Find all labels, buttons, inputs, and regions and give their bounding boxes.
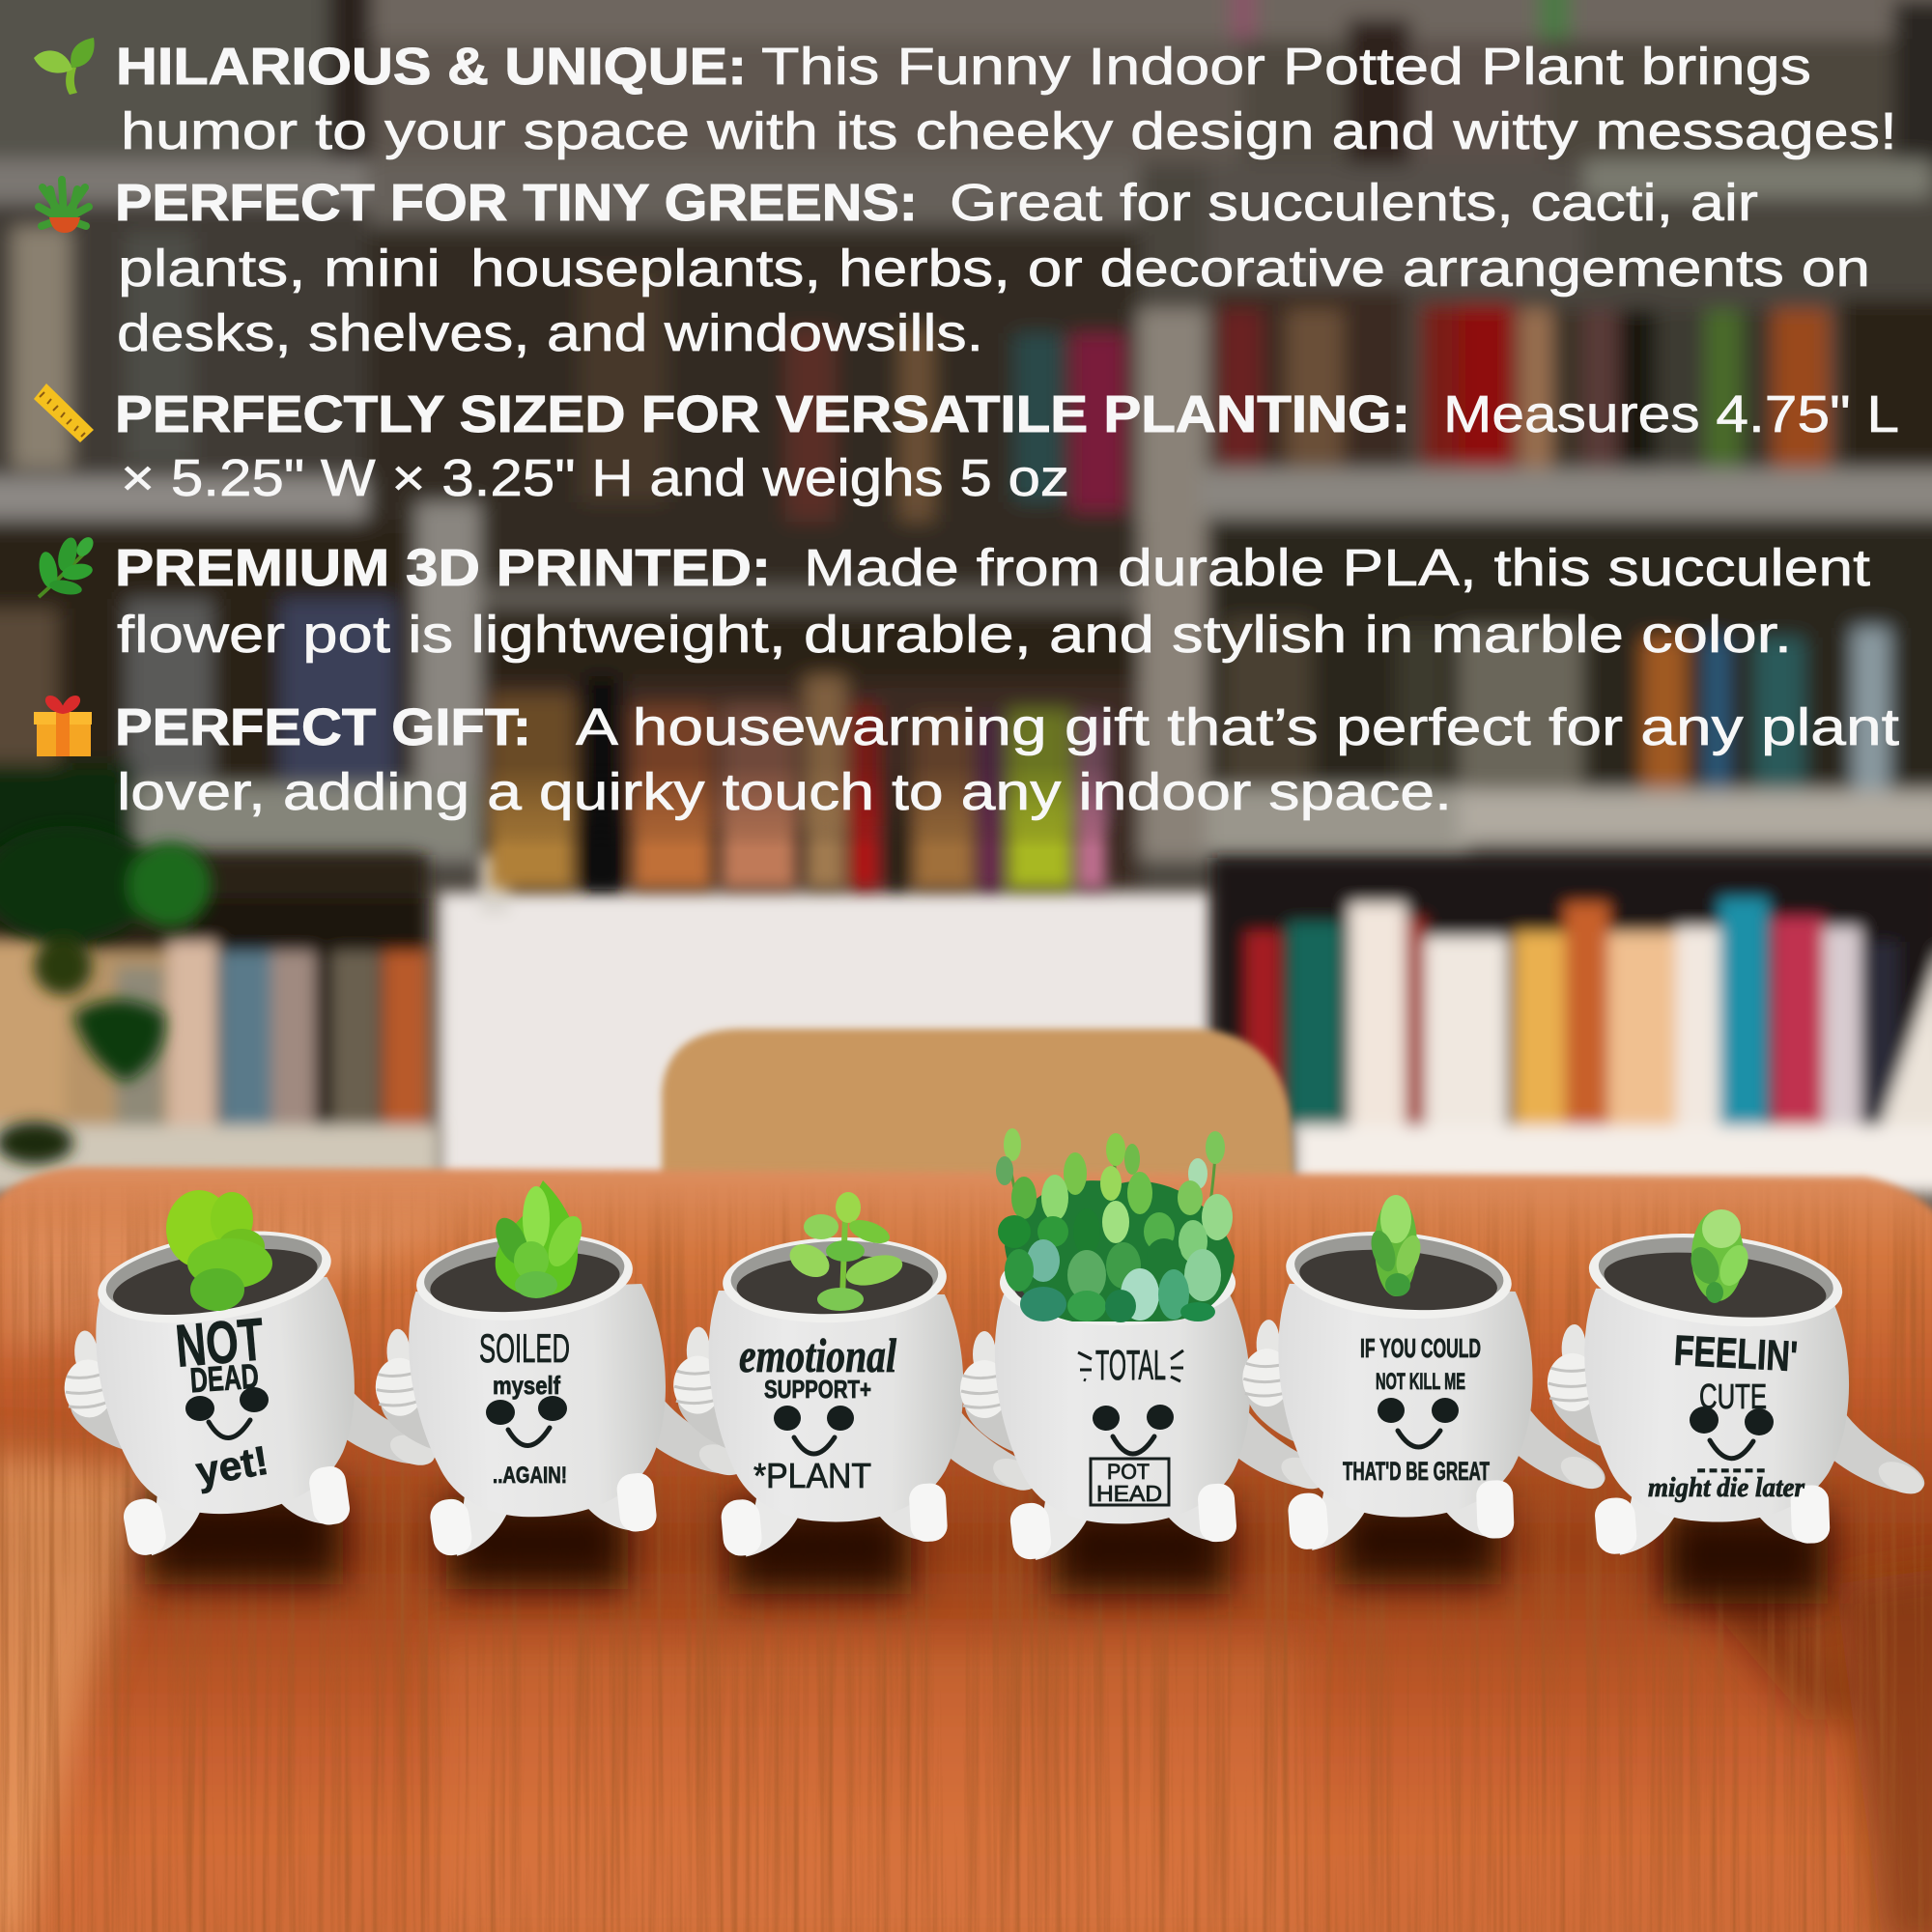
background: blurred bookshelves [0, 0, 1932, 1203]
text: heading and description: PERFECT GIFT: [115, 698, 531, 756]
pot wording: CUTE [1699, 1377, 1767, 1416]
pot shadows on table [145, 1488, 1828, 1604]
feature 2: perfect for tiny greens [39, 174, 1870, 362]
pot body [58, 1270, 445, 1562]
pot body [670, 1290, 1044, 1563]
pot wording [1343, 1333, 1490, 1486]
text: heading and description: This Funny Indoor Potted Plant brings [761, 38, 1811, 96]
pot wording: emotional [739, 1328, 896, 1382]
text: heading and description: Great for succulents, cacti, air [950, 174, 1758, 232]
icon: gift box [34, 697, 92, 756]
text: heading and description [116, 38, 1897, 160]
pot body [1542, 1287, 1932, 1567]
pot body [1236, 1282, 1615, 1561]
feature 4: premium 3D printed [37, 534, 1870, 664]
pot wording [1078, 1342, 1183, 1506]
face [486, 1396, 567, 1446]
face [185, 1387, 269, 1438]
pot wording: *PLANT [753, 1456, 871, 1495]
lower shelving and white frame [440, 855, 1212, 1203]
feature 5: perfect gift [34, 697, 1899, 821]
colored book spines under the overlay [480, 681, 1140, 889]
pot body [960, 1294, 1330, 1561]
pot rim with soil [1282, 1223, 1516, 1327]
pot wording: myself [493, 1371, 560, 1400]
wooden table [0, 1159, 1932, 1932]
pot body [372, 1280, 751, 1559]
pot wording: ...... [1695, 1453, 1767, 1477]
face [1093, 1405, 1174, 1454]
blurred green plant at left [0, 826, 212, 1164]
text: heading and description: PERFECTLY SIZED FOR VERSATILE PLANTING: [115, 385, 1410, 443]
pot rim with soil [92, 1216, 337, 1338]
pot rim with soil [1000, 1240, 1236, 1325]
pot rim with soil [1584, 1222, 1847, 1338]
pot 1: NOT DEAD yet [58, 1190, 445, 1562]
text: heading and description: flower pot is lightweight, durable, and stylish in marble color. [117, 606, 1792, 664]
pot wording: FEELIN' [1673, 1327, 1799, 1380]
feature 3: perfectly sized [34, 384, 1899, 507]
upper shelves, darkened behind text [0, 0, 1932, 966]
text: heading and description: × 5.25" W × 3.25" H and weighs 5 oz [121, 449, 1069, 507]
text: heading and description: PREMIUM 3D PRINTED: [115, 539, 771, 597]
succulent [166, 1190, 272, 1311]
succulent [489, 1180, 589, 1298]
pot wording: ..AGAIN! [493, 1463, 567, 1489]
succulent [1686, 1209, 1753, 1303]
text: heading and description [115, 698, 1899, 821]
icon: herb [37, 534, 97, 597]
pot wording: THAT'D BE GREAT [1343, 1457, 1490, 1486]
icon: ruler [34, 384, 94, 442]
left bookcase [0, 855, 440, 1193]
leafy plant [996, 1128, 1235, 1322]
pot wording: IF YOU COULD [1360, 1333, 1481, 1363]
pot 6: FEELIN' CUTE might die later [1542, 1209, 1932, 1567]
pot wording [173, 1306, 271, 1494]
text: heading and description: HILARIOUS & UNIQUE: [116, 38, 747, 96]
pot wording: SUPPORT+ [764, 1375, 871, 1404]
pot wording: might die later [1648, 1473, 1805, 1503]
icon: potted fern [39, 180, 89, 233]
text: heading and description: desks, shelves, and windowsills. [117, 304, 983, 362]
pot 3: emotional SUPPORT PLANT [670, 1192, 1044, 1563]
text: heading and description: houseplants, herbs, or decorative arrangements on [470, 240, 1870, 298]
pot 2: SOILED myself AGAIN [372, 1180, 751, 1559]
pot wording: DEAD [188, 1356, 260, 1400]
succulent [783, 1192, 906, 1311]
text: heading and description [115, 539, 1870, 664]
pot wording: POT [1107, 1460, 1150, 1484]
feature 1: hilarious and unique [34, 38, 1897, 160]
pot 4: TOTAL POT HEAD [960, 1128, 1330, 1561]
text: heading and description: Measures 4.75" L [1443, 385, 1899, 443]
text: heading and description: PERFECT FOR TINY GREENS: [115, 174, 918, 232]
face [1690, 1406, 1774, 1459]
colored books strip just above the white frame [490, 753, 1106, 889]
chair back [662, 1029, 1294, 1193]
pot wording [739, 1328, 896, 1495]
table surface [0, 1167, 1932, 1932]
pot wording: NOT [173, 1306, 267, 1380]
pot wording: TOTAL [1095, 1342, 1166, 1389]
text: heading and description [115, 385, 1899, 507]
feature list [34, 38, 1899, 821]
text: heading and description: A housewarming gift that’s perfect for any plant [576, 698, 1899, 756]
pot wording [1648, 1327, 1805, 1503]
right bookcase [1212, 858, 1932, 1193]
face [774, 1406, 854, 1454]
lighter and darker wood tones [0, 1217, 1932, 1932]
pot rim with soil [722, 1234, 948, 1326]
succulent [1367, 1195, 1425, 1296]
face [1378, 1398, 1459, 1447]
text: heading and description: lover, adding a quirky touch to any indoor space. [117, 763, 1452, 821]
pot rim with soil [412, 1225, 637, 1329]
text: heading and description: humor to your space with its cheeky design and witty messages! [121, 102, 1897, 160]
pot 5: IF YOU COULD NOT KILL ME [1236, 1195, 1615, 1561]
wood grain [0, 1159, 1932, 1932]
pot wording: yet! [192, 1437, 271, 1494]
pot wording [479, 1325, 570, 1489]
text: heading and description [115, 174, 1870, 362]
text: heading and description: Made from durable PLA, this succulent [804, 539, 1870, 597]
pot wording: SOILED [479, 1325, 570, 1371]
text: heading and description: plants, mini [118, 240, 440, 298]
pot wording: HEAD [1096, 1481, 1162, 1506]
icon: seedling [34, 38, 95, 95]
pot wording: NOT KILL ME [1376, 1369, 1465, 1395]
